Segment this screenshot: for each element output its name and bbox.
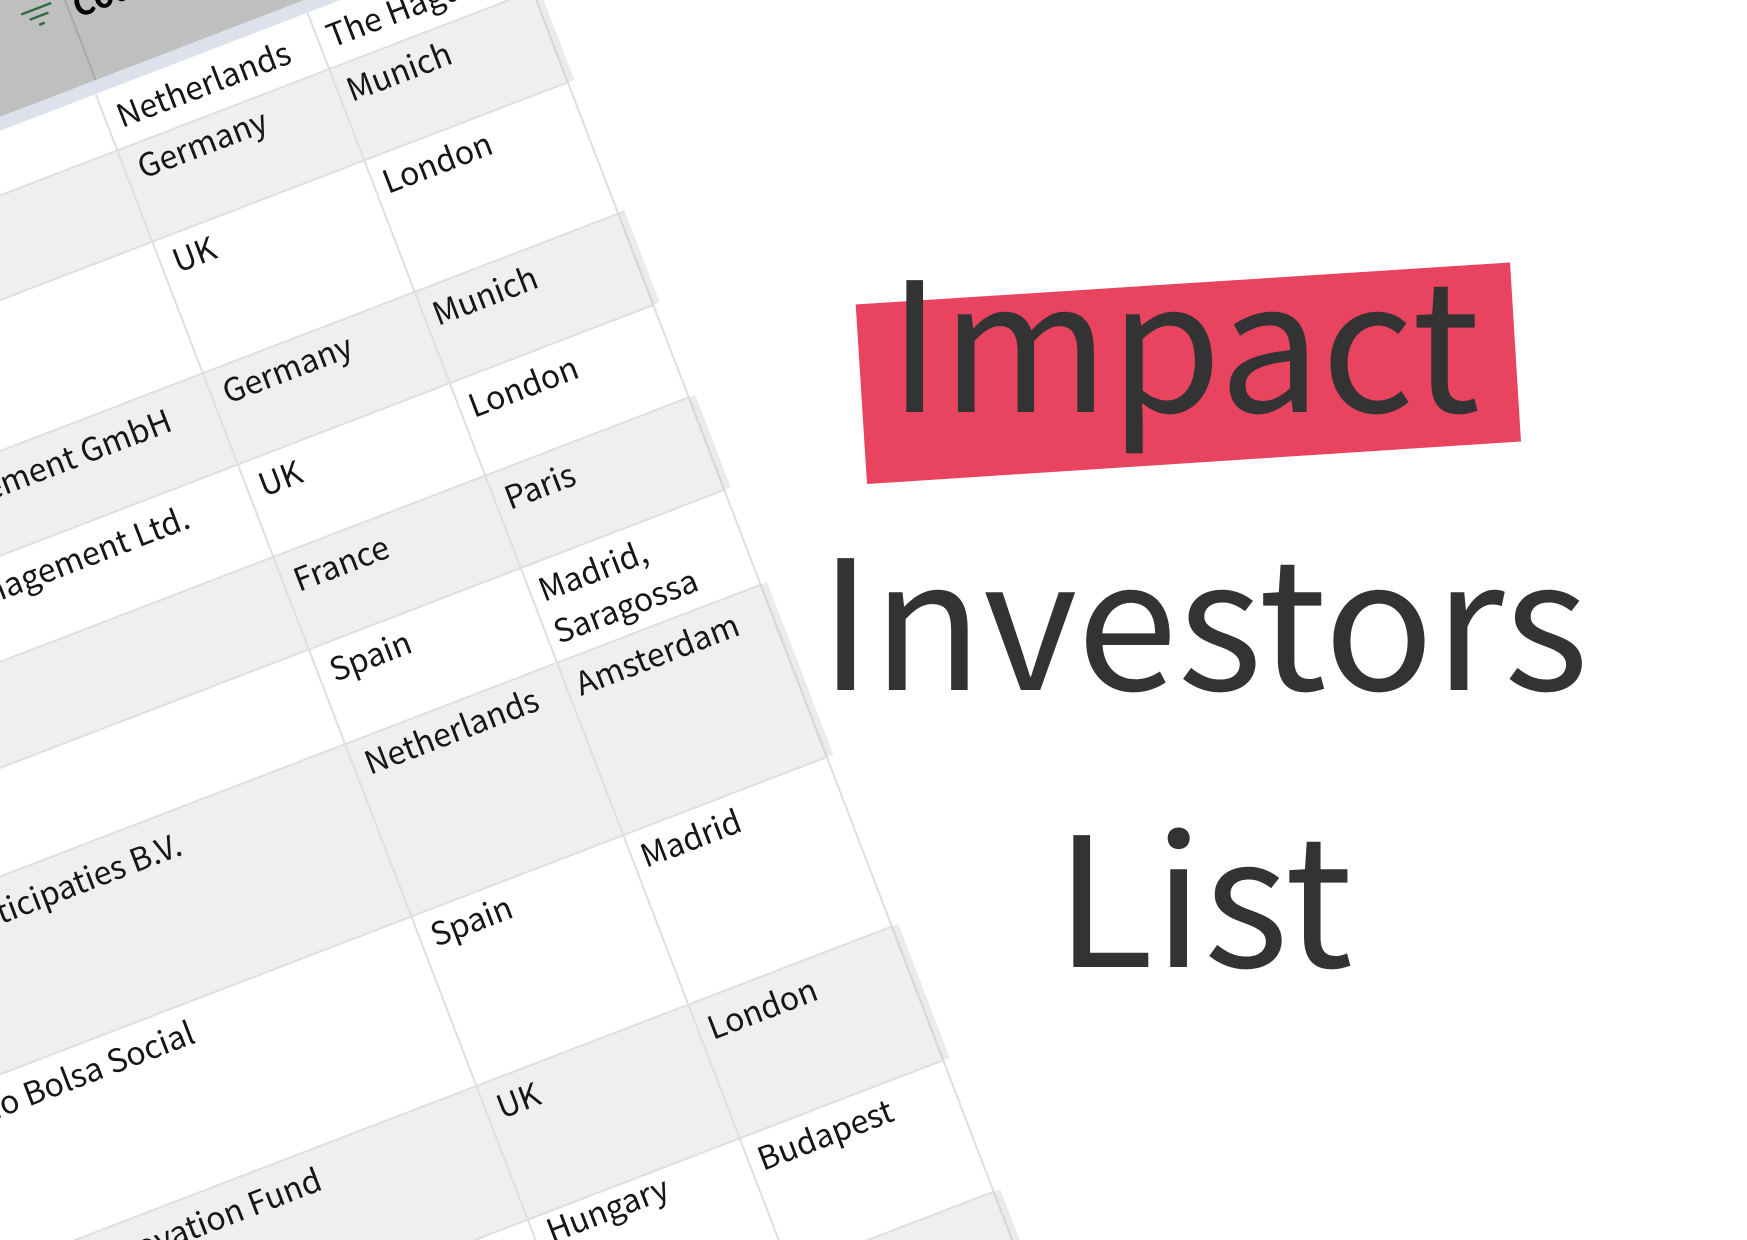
- column: countries: UK: [251, 448, 309, 506]
- column: cities: London: [375, 119, 499, 203]
- column: cities: London: [461, 343, 585, 427]
- title highlight: [856, 262, 1521, 484]
- column: cities: Amsterdam: [568, 601, 745, 705]
- column: countries: Netherlands: [109, 29, 297, 137]
- title: Impact: [888, 204, 1480, 465]
- column: countries: Germany: [130, 97, 274, 188]
- column: countries: Germany: [215, 322, 359, 413]
- title: List: [1055, 759, 1353, 1020]
- title: Investors: [819, 482, 1589, 743]
- column: cities: Paris: [497, 450, 582, 519]
- column: countries: France: [286, 523, 395, 601]
- table header band: [0, 0, 656, 273]
- column: countries: UK: [165, 224, 223, 282]
- column: cities: Madrid: [633, 797, 748, 877]
- panel: rotated spreadsheet table: [0, 0, 1229, 1240]
- column: cities: Saragossa: [546, 556, 704, 653]
- column: cities: Munich: [425, 253, 544, 335]
- column: countries: [109, 29, 675, 1240]
- column: countries: Spain: [423, 883, 519, 956]
- column: countries: UK: [489, 1070, 547, 1128]
- column: countries: Spain: [322, 618, 418, 691]
- column: countries: Netherlands: [357, 676, 545, 784]
- column: cities: [319, 0, 899, 1180]
- column: cities: Madrid,: [531, 528, 654, 611]
- shaded table rows: [0, 0, 1072, 1240]
- column: cities: Budapest: [750, 1086, 899, 1180]
- title: [819, 204, 1589, 1020]
- column: cities: London: [700, 965, 824, 1049]
- icon: filter: [21, 2, 57, 31]
- table grid: [0, 0, 1229, 1240]
- column: investor names: [0, 396, 328, 1240]
- column: cities: Munich: [339, 29, 458, 111]
